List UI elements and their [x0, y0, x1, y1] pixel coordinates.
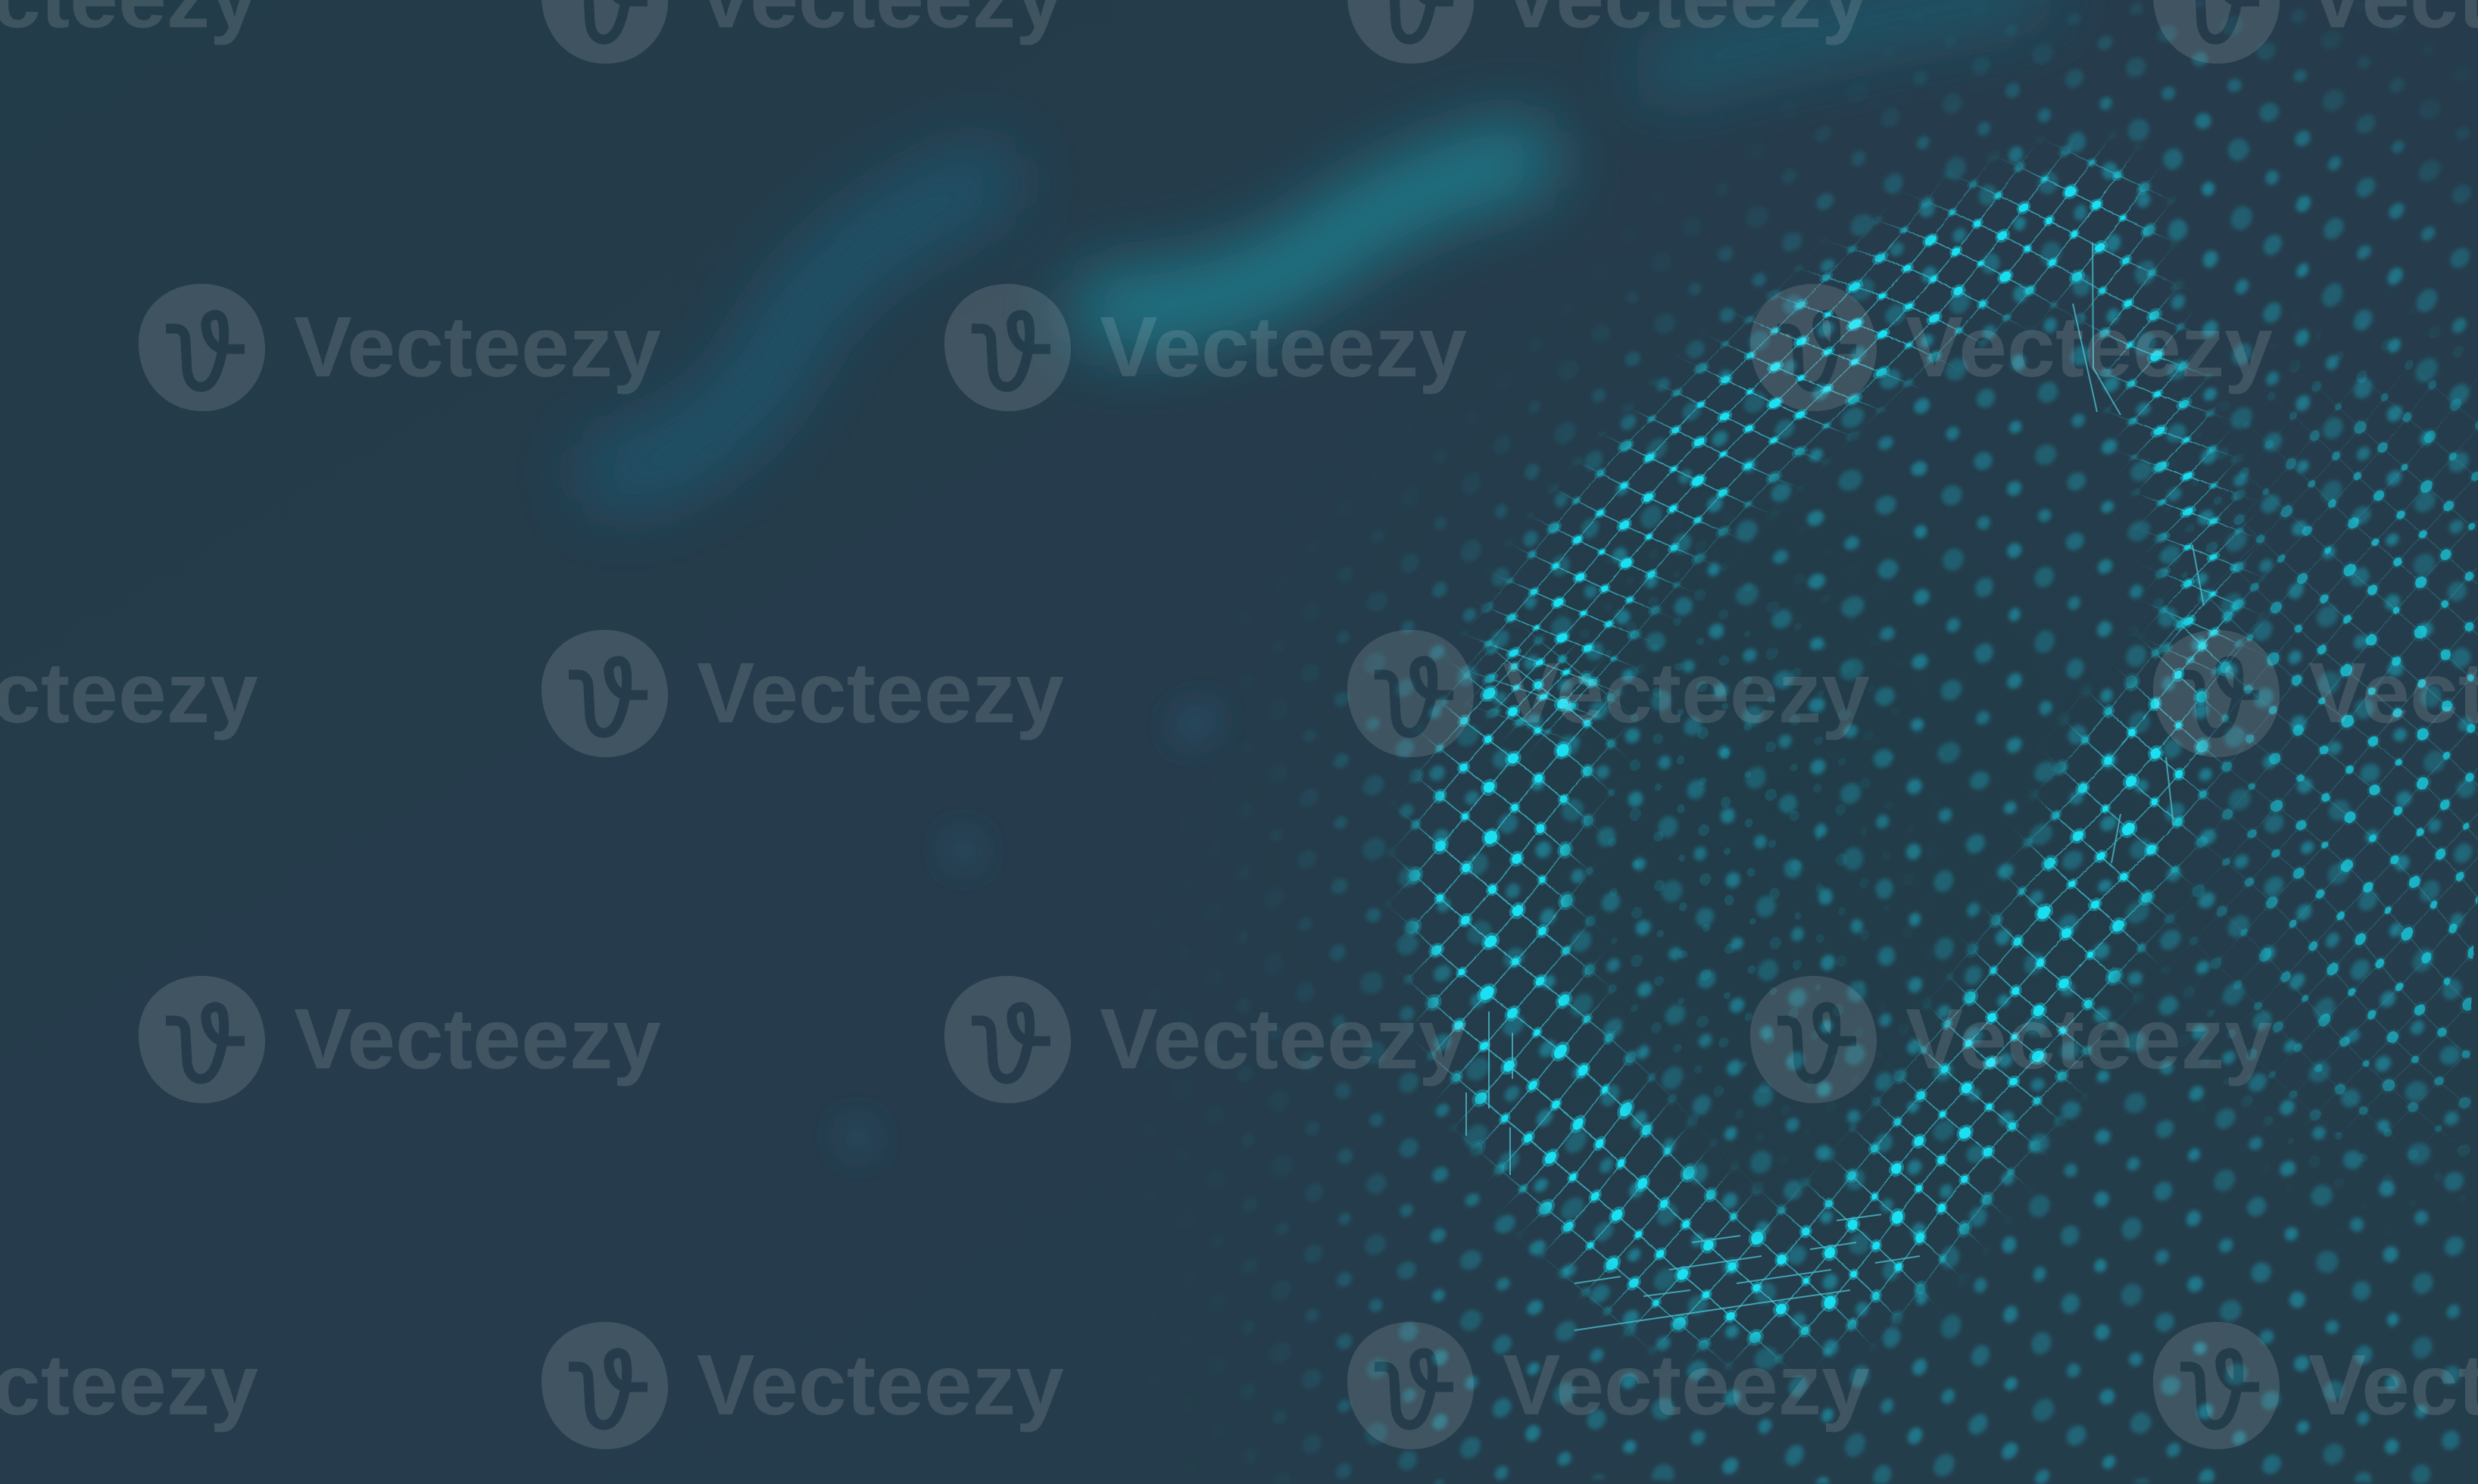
smear: left blue streak [613, 182, 985, 473]
watermark row 5: Vecteezy [697, 1337, 1064, 1433]
mesh band: right lattice [2045, 379, 2478, 1136]
watermark row 2 [139, 284, 2273, 411]
smear: central teal streak [1106, 159, 1522, 310]
watermark row 4: Vecteezy [1905, 991, 2273, 1086]
watermark row 2: Vecteezy [1100, 299, 1467, 394]
watermark row 3 [0, 630, 2478, 757]
out-of-focus dot field [1248, 2, 2477, 1484]
watermark row 5 [0, 1322, 2478, 1449]
watermark row 1 [0, 0, 2478, 64]
watermark row 3: Vecteezy [1503, 645, 1870, 740]
smear: faint spots at lower centre [856, 719, 1204, 1140]
watermark row 5: Vecteezy [1503, 1337, 1870, 1433]
construction lines on the mesh [1466, 242, 2204, 1330]
watermark row 3: Vecteezy [697, 645, 1064, 740]
mesh interior tone [1060, 151, 2478, 1439]
blurred light smears [613, 0, 2030, 1140]
watermark row 4: Vecteezy [1100, 991, 1467, 1086]
smear: upper faint streak [1659, 0, 2030, 72]
sharp dots on the right [1583, 333, 2478, 1180]
watermark row 2: Vecteezy [1905, 299, 2273, 394]
watermark row 4: Vecteezy [294, 991, 661, 1086]
mesh band: lower ring [1388, 588, 2249, 1370]
watermark row 2: Vecteezy [294, 299, 661, 394]
watermark row 4 [139, 976, 2273, 1103]
